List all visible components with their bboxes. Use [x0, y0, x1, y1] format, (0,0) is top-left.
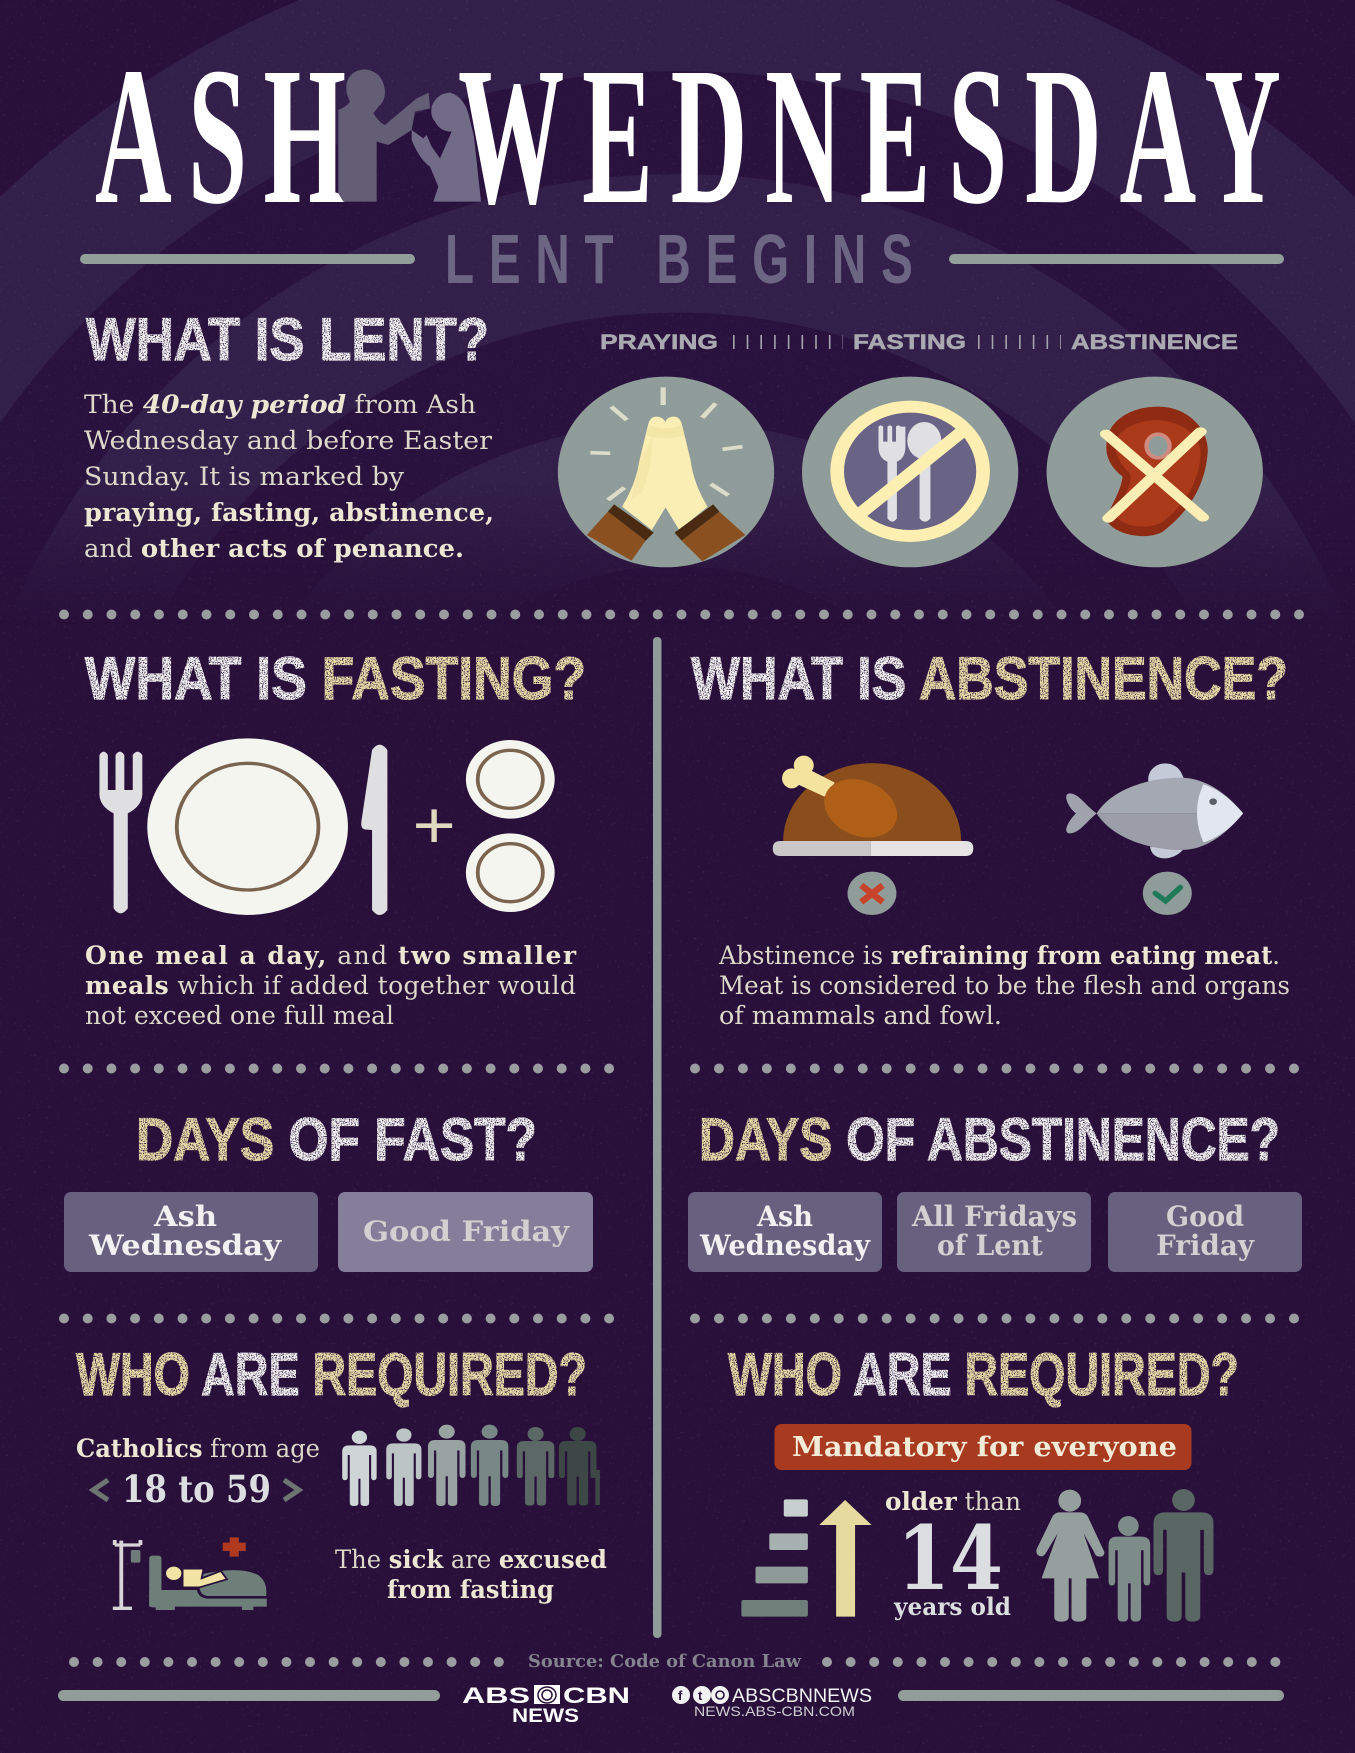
labels: praying, fasting, abstinence [600, 331, 1238, 354]
icon: roast turkey with cross mark [773, 756, 973, 915]
text block: Lent definition: praying, fasting, abstinence, [84, 498, 494, 527]
text block: Catholics from age 18 to 59 [76, 1434, 320, 1511]
heading: who are required, abstinence: WHO ARE REQUIRED? [728, 1341, 1239, 1408]
text block: fasting definition: meals which if added together would [85, 971, 576, 1000]
source text: Source: Code of Canon Law [528, 1651, 801, 1672]
social media handle and website: t [698, 1688, 703, 1703]
section: what is Lent [84, 306, 494, 563]
text block: fasting definition [85, 941, 577, 1030]
illustration: plate with fork and knife plus two small plates [99, 738, 555, 915]
box: All Fridays of Lent [897, 1192, 1091, 1272]
box: Ash Wednesday: Ash [153, 1200, 217, 1233]
text block: sick are excused: The sick are excused [335, 1545, 607, 1574]
heading: days of abstinence: DAYS OF ABSTINENCE? [699, 1106, 1280, 1173]
illustration: turkey and fish [773, 756, 1243, 915]
text block: abstinence definition: Abstinence is refraining from eating meat. [718, 941, 1280, 970]
text block: older than 14 years old [885, 1487, 1021, 1621]
icon: fish with check mark [1066, 763, 1243, 915]
text block: Lent definition: Wednesday and before Easter [84, 426, 492, 455]
section: days of abstinence [688, 1106, 1302, 1272]
icon: no fork and spoon [802, 377, 1018, 567]
icon: sick person in bed with IV [113, 1537, 268, 1610]
box: Good Friday: Friday [1156, 1229, 1255, 1262]
section: days of fast [64, 1106, 593, 1272]
section: what is fasting [85, 645, 586, 1030]
text block: fasting definition: One meal a day, and two smaller [85, 941, 577, 970]
section: who are required to abstain [728, 1341, 1239, 1622]
text block: sick are excused [335, 1545, 607, 1604]
text block: older than 14 years old: years old [893, 1592, 1011, 1621]
logo: ABS-CBN News: NEWS [512, 1706, 579, 1727]
title: Ash Wednesday: ASH [95, 28, 346, 246]
box: Good Friday [338, 1192, 593, 1272]
icons row [558, 377, 1263, 567]
box: Ash Wednesday: Ash [756, 1200, 813, 1233]
text block: fasting definition: not exceed one full meal [85, 1001, 394, 1030]
text block: Lent definition: Sunday. It is marked by [84, 462, 405, 491]
social media handle and website: NEWS.ABS-CBN.COM [694, 1703, 855, 1719]
social media handle and website: ABSCBNNEWS [732, 1686, 872, 1707]
text block: older than 14 years old: 14 [897, 1506, 1003, 1610]
text block: sick are excused: from fasting [387, 1575, 554, 1604]
box: Good Friday: Good [1166, 1200, 1244, 1233]
social media handle and website: f [678, 1688, 683, 1703]
text block: Catholics from age 18 to 59: Catholics from age [76, 1434, 320, 1463]
text block: Lent definition [84, 390, 494, 563]
box: Good Friday: Good Friday [363, 1215, 570, 1248]
badge: mandatory for everyone [774, 1424, 1192, 1470]
icons: steps and up arrow [741, 1499, 872, 1617]
labels: praying, fasting, abstinence: ABSTINENCE [1071, 331, 1238, 354]
box: All Fridays of Lent: of Lent [937, 1229, 1043, 1262]
box: Ash Wednesday [688, 1192, 882, 1272]
text block: abstinence definition [718, 941, 1290, 1030]
icon: no meat [1047, 377, 1263, 567]
box: Ash Wednesday: Wednesday [88, 1229, 282, 1262]
dotted divider rows and center divider [64, 614, 1303, 1662]
text block: Lent definition: The 40-day period from Ash [84, 390, 476, 419]
text block: abstinence definition: Meat is considered to be the flesh and organs [719, 971, 1290, 1000]
labels: praying, fasting, abstinence: FASTING [853, 331, 966, 354]
heading: days of fast: DAYS OF FAST? [136, 1106, 537, 1173]
illustration: man and woman silhouettes [338, 69, 481, 202]
text block: older than 14 years old: older than [885, 1487, 1021, 1516]
heading: what is abstinence: WHAT IS ABSTINENCE? [691, 645, 1288, 712]
subtitle: Lent Begins with rules: LENT BEGINS [445, 220, 913, 298]
footer [58, 1683, 1284, 1727]
badge: mandatory for everyone: Mandatory for everyone [792, 1432, 1177, 1463]
social media handle and website [672, 1686, 872, 1719]
icon: praying hands [558, 377, 774, 567]
section: what is abstinence [691, 645, 1290, 1030]
icons: woman, child and man [1036, 1489, 1213, 1622]
title: Ash Wednesday: WEDNESDAY [458, 28, 1281, 246]
icons: six people by age [342, 1425, 600, 1506]
logo: ABS-CBN News [462, 1683, 630, 1727]
box: Ash Wednesday [64, 1192, 318, 1272]
box: Good Friday [1108, 1192, 1302, 1272]
section: who are required to fast [76, 1341, 607, 1610]
logo: ABS-CBN News: CBN [563, 1683, 630, 1708]
title: Ash Wednesday [95, 28, 1281, 246]
labels: praying, fasting, abstinence: PRAYING [600, 331, 718, 354]
box: Ash Wednesday: Wednesday [699, 1229, 871, 1262]
logo: ABS-CBN News: ABS [462, 1683, 530, 1708]
subtitle: Lent Begins with rules [80, 220, 1284, 298]
heading: what is fasting: WHAT IS FASTING? [85, 645, 586, 712]
text block: Lent definition: and other acts of penance. [84, 534, 464, 563]
text block: Catholics from age 18 to 59: 18 to 59 [122, 1467, 271, 1511]
box: All Fridays of Lent: All Fridays [911, 1200, 1077, 1233]
heading: who are required, fasting: WHO ARE REQUIRED? [76, 1341, 587, 1408]
text block: abstinence definition: of mammals and fowl. [719, 1001, 1002, 1030]
heading: what is Lent: WHAT IS LENT? [86, 306, 489, 373]
